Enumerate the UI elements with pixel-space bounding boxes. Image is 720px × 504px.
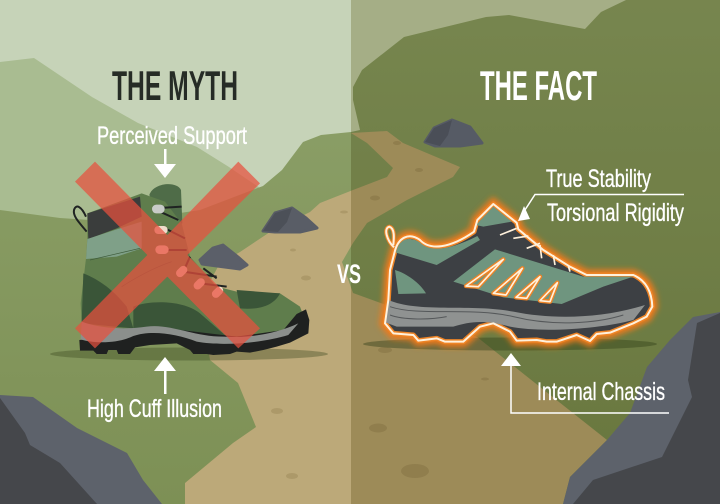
arrow: high cuff [154,357,176,394]
rock: behind boot [200,245,247,269]
rock: top right [425,120,482,146]
shoe ground shadow [363,338,657,350]
title: the myth: THE MYTH [112,62,238,109]
rock: centre [263,208,317,232]
red X mark [75,162,260,348]
label: perceived support: Perceived Support [97,122,247,150]
hiking boot (the myth) [74,184,309,355]
title: the fact: THE FACT [480,62,597,109]
callout line: stability [518,194,684,221]
boot ground shadow [50,348,328,360]
rock: bottom left [0,395,162,504]
label: high cuff illusion: High Cuff Illusion [87,395,222,423]
glowing trail shoe (the fact) [385,204,652,342]
label: internal chassis: Internal Chassis [537,378,665,406]
vs label: VS [337,259,361,289]
rock: bottom right [563,312,720,504]
label: true stability: True Stability [546,165,651,193]
arrow: perceived support [154,149,176,178]
callout line: chassis [501,353,669,413]
